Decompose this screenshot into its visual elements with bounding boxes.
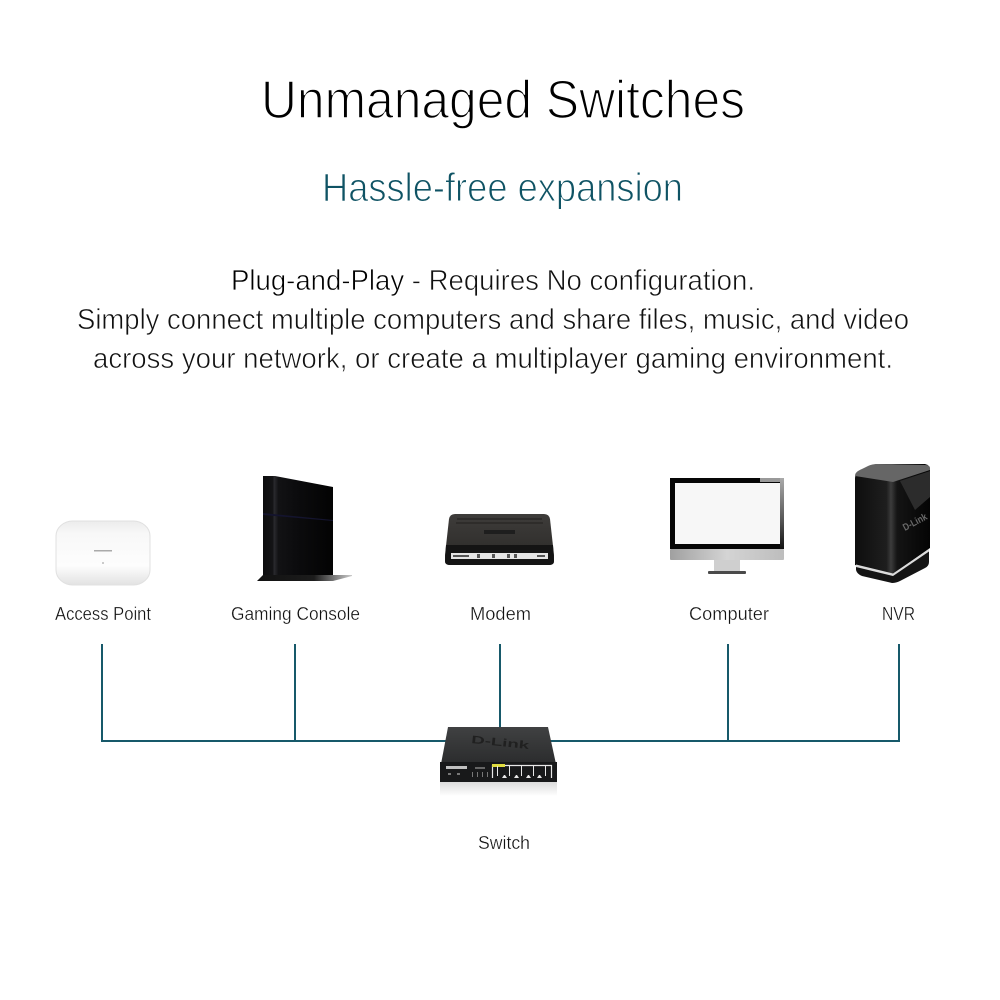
icon: switch [440,727,557,796]
description text block: across your network, or create a multiplayer gaming environment. [93,343,893,375]
network connection lines [102,644,899,741]
label: NVR: NVR [882,604,915,624]
icon: NVR [855,464,930,583]
icon: switch: D-Link [471,734,531,752]
label: computer: Computer [689,604,769,624]
icon: modem [445,514,554,565]
label: access point: Access Point [55,604,151,624]
icon: gaming console [257,476,352,581]
description text block: Plug-and-Play - Requires No configuration. [231,265,755,297]
description text block [77,265,909,375]
label: modem: Modem [470,604,531,624]
label: gaming console: Gaming Console [231,604,360,624]
title: Unmanaged Switches [261,70,745,130]
subtitle: Hassle-free expansion [322,166,683,210]
icon: computer monitor [670,478,784,574]
icon: access point [56,521,150,585]
icon: NVR: D-Link [901,512,930,534]
description text block: Simply connect multiple computers and share files, music, and video [77,304,909,336]
label: switch: Switch [478,833,530,853]
